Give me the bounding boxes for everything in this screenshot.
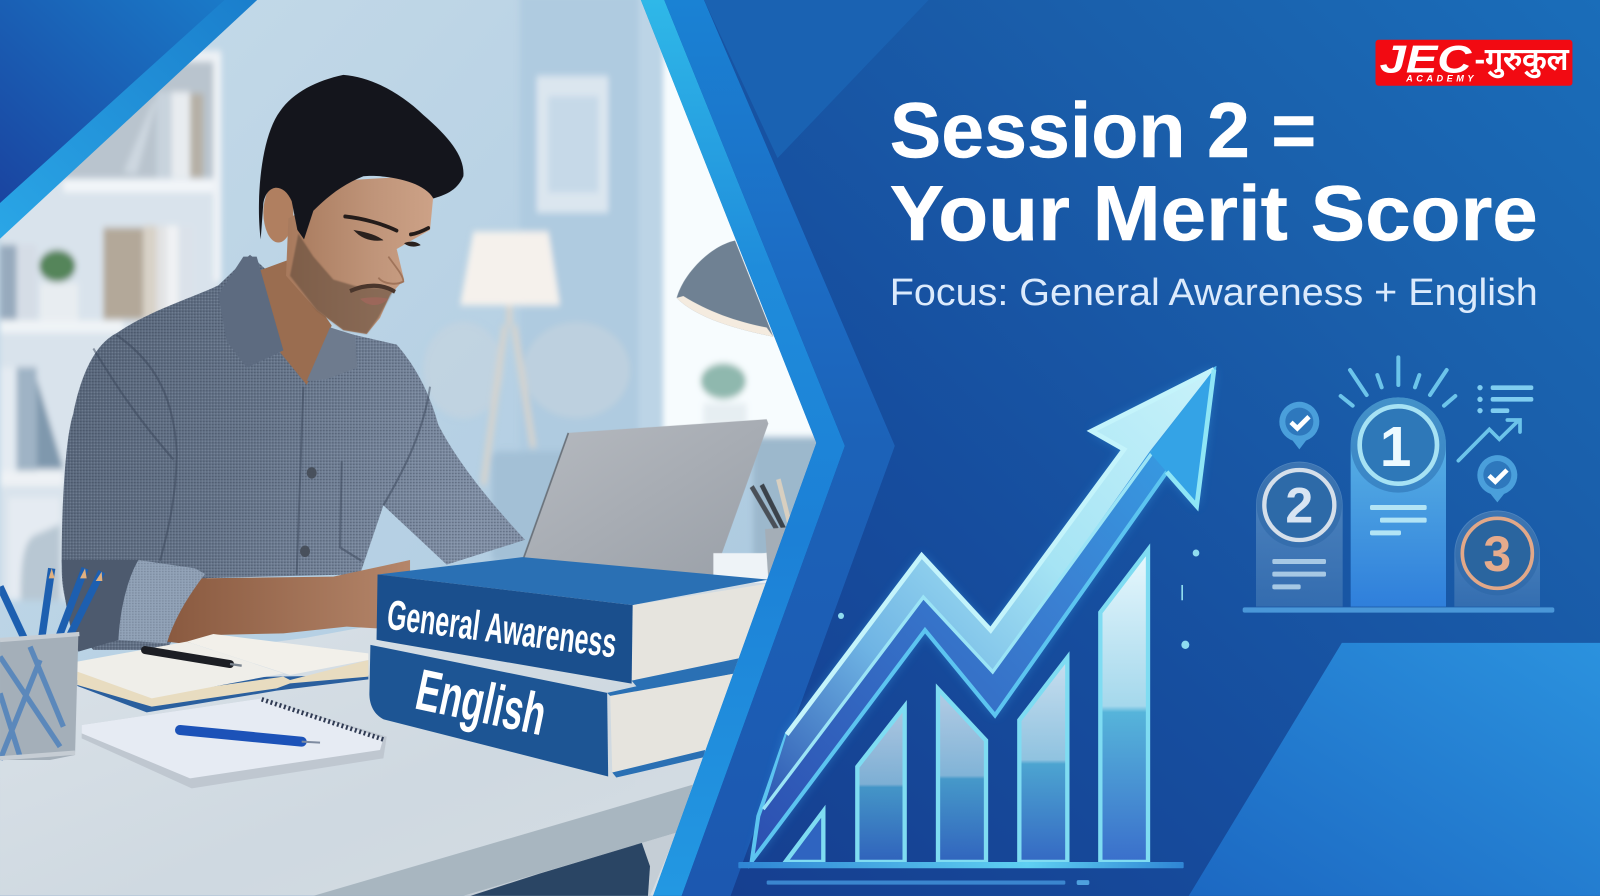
pillar 2 (1256, 462, 1343, 607)
collar (218, 257, 283, 368)
pillar 1: 1 (1380, 416, 1411, 479)
check bubble left (1279, 402, 1319, 449)
spine label: General Awareness (385, 591, 619, 666)
stubble (290, 234, 394, 334)
pillar 2: 2 (1285, 478, 1313, 534)
black pen (145, 650, 230, 664)
rising arrow and bar chart (738, 369, 1214, 885)
trend arrow (1458, 420, 1520, 461)
podium base (1243, 607, 1554, 613)
eyes and brows (345, 216, 428, 234)
sparkle dots (838, 550, 1199, 649)
rays (1341, 357, 1455, 406)
face (286, 176, 433, 334)
jeans (470, 843, 650, 896)
moustache and lips (350, 286, 395, 292)
bookshelf (0, 50, 221, 600)
chart baseline (738, 862, 1184, 868)
list lines (1477, 385, 1533, 413)
title: Session 2 = (890, 88, 1316, 174)
room background (0, 0, 840, 896)
title (890, 88, 1538, 257)
spine label: English (411, 657, 552, 748)
pencil cup (0, 568, 102, 760)
logo: JEC Academy Gurukul: ACADEMY (1405, 74, 1474, 84)
arrow glow (752, 369, 1214, 861)
right panel background (704, 0, 1600, 896)
bars (785, 550, 1148, 862)
corner accent: top-left (0, 0, 257, 239)
chevron band: medium (664, 0, 895, 896)
podium icon (1243, 357, 1554, 613)
desk front edge (313, 785, 693, 896)
small pencil cup (713, 479, 790, 583)
book: English (369, 645, 740, 778)
shirt (62, 255, 525, 650)
logo: JEC Academy Gurukul: JEC (1380, 38, 1473, 81)
photo panel: student at desk (0, 0, 840, 896)
desk surface (0, 551, 816, 896)
neck (260, 260, 332, 385)
notepad with blue pen (82, 698, 387, 788)
subtitle: Focus: General Awareness + English (890, 271, 1538, 313)
ear (263, 183, 293, 242)
man (62, 75, 525, 650)
chevron band: bright (641, 0, 845, 896)
pillar 3: 3 (1483, 526, 1511, 582)
logo: JEC Academy Gurukul (1376, 38, 1572, 86)
desk lamp (677, 241, 773, 337)
pillar 3 (1454, 511, 1540, 607)
logo: JEC Academy Gurukul: -गुरुकुल (1474, 42, 1570, 78)
check bubble right (1477, 455, 1517, 502)
bottom-right accent shape (1189, 643, 1600, 896)
hair (259, 75, 463, 239)
title: Your Merit Score (890, 171, 1538, 257)
pillar 1 (1351, 397, 1446, 607)
arrow ribbon (752, 369, 1214, 861)
laptop (523, 419, 768, 577)
book: General Awareness (377, 557, 768, 687)
open book (77, 634, 368, 712)
forearm and cuff (62, 560, 410, 652)
